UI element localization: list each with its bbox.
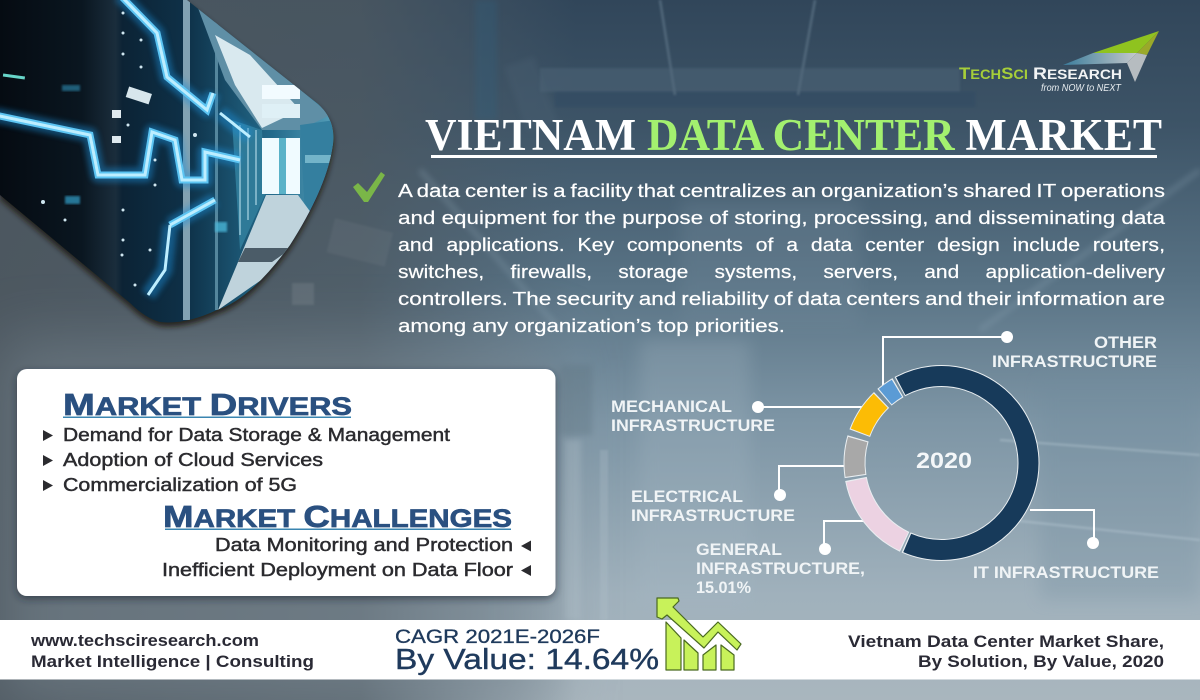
CAGR callout: By Value: 14.64% <box>395 644 659 676</box>
label: mechanical infrastructure <box>611 398 775 435</box>
label: other infrastructure <box>992 334 1157 371</box>
footer website and tagline <box>30 632 314 671</box>
label: general infrastructure: GENERAL <box>696 541 782 559</box>
leader lines <box>752 331 1099 555</box>
hero photo: server room in rounded diagonal shape <box>0 0 340 330</box>
title: VIETNAM DATA CENTER MARKET <box>425 110 1162 160</box>
logo mark <box>1063 31 1159 82</box>
logo: TechSci Research <box>959 31 1159 83</box>
label: other infrastructure: OTHER <box>1094 334 1157 352</box>
label: IT infrastructure: IT INFRASTRUCTURE <box>973 564 1159 582</box>
driver list <box>43 425 450 495</box>
label: general infrastructure: 15.01% <box>696 579 751 597</box>
icon: green check mark <box>353 172 385 202</box>
label: general infrastructure: INFRASTRUCTURE, <box>696 560 865 578</box>
donut chart: market share by solution, 2020 <box>611 331 1159 597</box>
panel: market drivers and challenges <box>17 369 556 596</box>
heading: market drivers: MARKET DRIVERS <box>63 387 352 422</box>
chart source caption: By Solution, By Value, 2020 <box>918 653 1164 671</box>
footer band <box>0 620 1200 680</box>
description paragraph: and equipment for the purpose of storing, processing, and disseminating data <box>398 207 1166 228</box>
description paragraph: and applications. Key components of a data center design include routers, <box>398 234 1165 255</box>
label: mechanical infrastructure: INFRASTRUCTURE <box>611 417 775 435</box>
footer website and tagline: Market Intelligence | Consulting <box>31 653 314 671</box>
description paragraph <box>398 180 1166 336</box>
donut segments <box>819 340 1064 586</box>
heading: market challenges: MARKET CHALLENGES <box>163 499 512 534</box>
description paragraph: A data center is a facility that centralizes an organization’s shared IT operations <box>398 180 1165 201</box>
challenge list: Inefficient Deployment on Data Floor <box>162 560 513 580</box>
logo: TechSci Research: RESEARCH <box>1033 64 1122 83</box>
CAGR callout: CAGR 2021E-2026F <box>395 627 600 648</box>
donut center year: 2020 <box>916 448 972 473</box>
chart source caption <box>848 633 1164 671</box>
driver list: Commercialization of 5G <box>63 475 297 495</box>
label: electrical infrastructure <box>631 488 795 525</box>
driver list: Demand for Data Storage & Management <box>63 425 450 445</box>
label: general infrastructure <box>696 541 865 597</box>
label: electrical infrastructure: INFRASTRUCTURE <box>631 507 795 525</box>
footer website and tagline: www.techsciresearch.com <box>30 632 259 650</box>
chart source caption: Vietnam Data Center Market Share, <box>848 633 1164 651</box>
description paragraph: controllers. The security and reliability of data centers and their information are <box>398 288 1165 309</box>
logo wordmark: TECHSCI <box>959 64 1028 83</box>
CAGR callout <box>395 627 659 676</box>
challenge list <box>162 535 531 580</box>
icon: rising bar chart with arrow <box>657 598 741 670</box>
description paragraph: switches, firewalls, storage systems, servers, and application-delivery <box>398 261 1166 282</box>
driver list: Adoption of Cloud Services <box>63 450 323 470</box>
label: mechanical infrastructure: MECHANICAL <box>611 398 732 416</box>
description paragraph: among any organization’s top priorities. <box>398 315 785 336</box>
challenge list: Data Monitoring and Protection <box>215 535 513 555</box>
logo tagline: from NOW to NEXT <box>1041 82 1122 94</box>
label: other infrastructure: INFRASTRUCTURE <box>992 353 1157 371</box>
label: electrical infrastructure: ELECTRICAL <box>631 488 743 506</box>
